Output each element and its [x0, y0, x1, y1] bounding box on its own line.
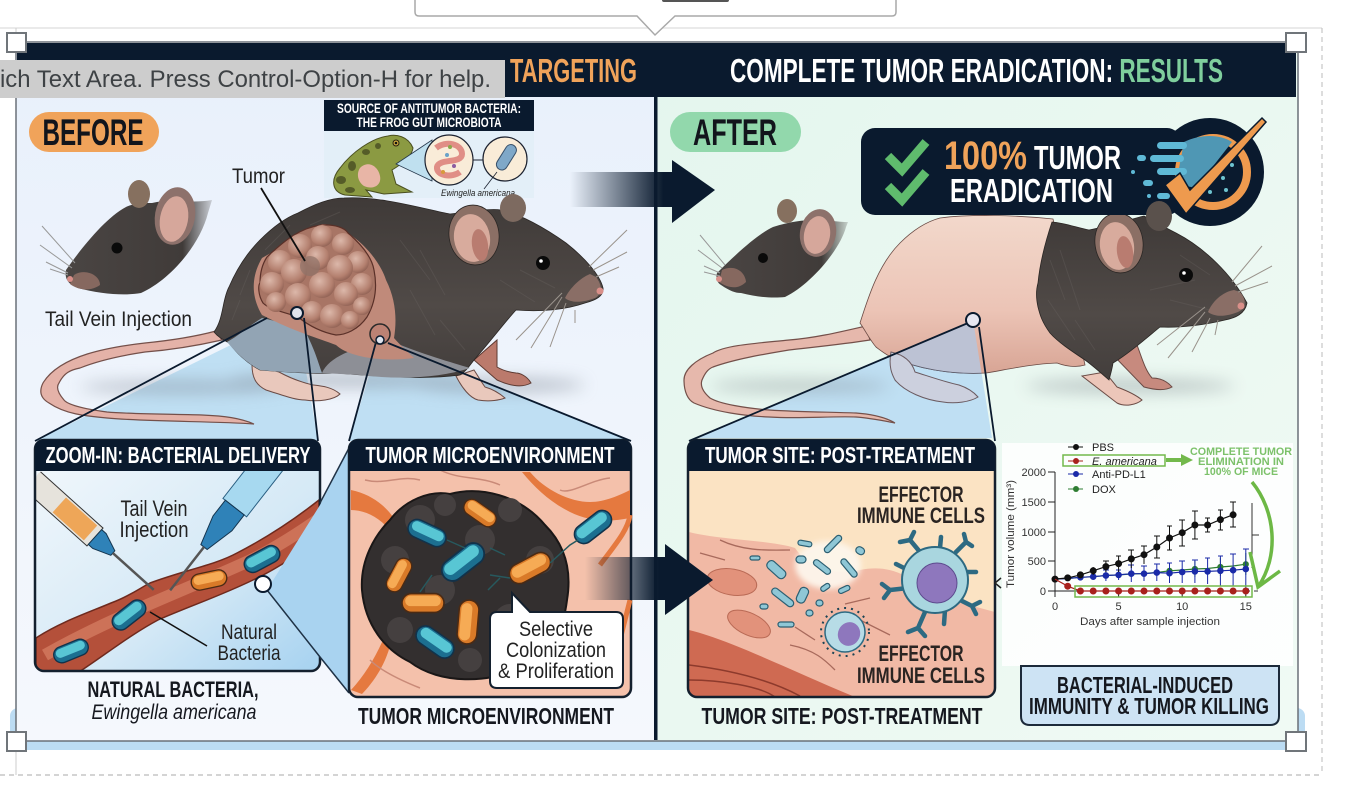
shadow under left mouse — [80, 373, 585, 393]
text: 100% tumor eradication — [944, 134, 1121, 209]
tumor core — [362, 491, 569, 679]
caption: tumor microenvironment: TUMOR MICROENVIRONMENT — [358, 703, 614, 729]
pink body — [860, 215, 1085, 373]
right mouse back ear over badge — [1146, 201, 1172, 231]
tumor mass — [259, 225, 376, 335]
label: effector immune cells top — [857, 482, 985, 528]
caption: natural bacteria — [88, 677, 258, 724]
panel: after background — [656, 44, 1298, 741]
header — [35, 440, 320, 471]
panel: tumor site post-treatment: TUMOR SITE: POST-TREATMENT — [705, 442, 975, 468]
label: tail vein injection: Injection — [120, 517, 188, 542]
editor toolbar popup — [415, 0, 896, 35]
debris fragments — [750, 534, 866, 627]
eye and nose — [1179, 268, 1193, 282]
legend: E. americana — [1092, 456, 1157, 468]
axis labels: Days after sample injection — [1080, 616, 1220, 628]
centre divider — [654, 97, 658, 740]
fur highlights — [1048, 250, 1210, 350]
beam: tumor site zoom fill — [698, 320, 992, 438]
chart: tumor volume — [995, 442, 1293, 666]
series: anti-PD-L1 — [1055, 549, 1249, 589]
axis labels: 2000 — [1022, 467, 1046, 479]
blood vessel — [36, 500, 319, 672]
legend — [1063, 442, 1165, 496]
label: natural bacteria: Bacteria — [218, 642, 281, 665]
title: complete tumor eradication results: COMPLETE TUMOR ERADICATION: RESULTS — [730, 52, 1223, 89]
syringe: left — [36, 472, 154, 591]
icon: large immune cell — [882, 532, 980, 636]
note: complete tumor elimination — [1190, 446, 1292, 478]
title: left targeting: TAIL VEIN BACTERIAL INJECTION: — [30, 55, 406, 91]
header — [688, 440, 995, 471]
panel: frog gut source: THE FROG GUT MICROBIOTA — [356, 115, 502, 130]
body tinted by beam — [898, 324, 982, 374]
axis labels: 0 — [1040, 586, 1046, 598]
tail — [684, 326, 895, 423]
mid leg — [1082, 372, 1142, 405]
caption: tumor site: TUMOR SITE: POST-TREATMENT — [702, 703, 982, 729]
text: 100% tumor eradication: TUMOR — [1034, 139, 1121, 176]
header bar — [17, 43, 1296, 97]
panel: tumor site post-treatment — [688, 440, 995, 697]
label: tail vein injection: Tail Vein — [120, 496, 188, 521]
tooltip: rich text area help — [0, 60, 505, 98]
treated mouse — [684, 210, 1272, 423]
series: PBS — [1052, 502, 1236, 582]
shadow under right mouse — [710, 379, 1235, 393]
ears — [500, 194, 526, 222]
panel: frog gut source: Ewingella americana — [441, 188, 515, 199]
tissue — [689, 532, 995, 697]
axis labels: Tumor volume (mm³) — [1005, 480, 1017, 588]
panel: frog gut source: SOURCE OF ANTITUMOR BACTERIA: — [337, 101, 521, 116]
beam outlines: tail vein — [35, 307, 318, 441]
panel: zoom-in bacterial delivery — [34, 438, 322, 672]
label: effector immune cells bottom: IMMUNE CELLS — [857, 663, 985, 688]
mouse with tumor — [41, 194, 627, 424]
cells in tissue — [708, 568, 758, 596]
small mouse: after — [698, 199, 848, 298]
axis labels: 1500 — [1022, 497, 1046, 509]
header — [349, 440, 631, 471]
arrow: before to after top — [570, 160, 715, 223]
icon: gut close-up — [396, 135, 473, 185]
significance bracket — [1252, 503, 1259, 591]
label: tumor: Tumor — [232, 165, 285, 188]
panel border — [35, 440, 320, 671]
note: complete tumor elimination: 100% OF MICE — [1204, 466, 1278, 478]
series: DOX — [1055, 553, 1248, 579]
caption: natural bacteria: Ewingella americana — [92, 701, 256, 724]
caption: natural bacteria: NATURAL BACTERIA, — [88, 677, 258, 702]
axis labels: 1000 — [1022, 527, 1046, 539]
arrow: legend to note — [1166, 454, 1193, 466]
axes — [1048, 472, 1250, 597]
vessel — [689, 630, 855, 697]
rear leg — [252, 365, 340, 401]
ears — [1091, 210, 1147, 276]
label: effector immune cells top: IMMUNE CELLS — [857, 503, 985, 528]
axis labels: 0 — [1052, 601, 1058, 613]
beam outlines: tumor site — [689, 313, 995, 441]
front leg — [1113, 345, 1172, 390]
beam: vessel to tumor microenvironment — [255, 448, 349, 693]
syringe: right — [169, 471, 283, 591]
mid leg — [456, 370, 505, 401]
axis labels: 500 — [1028, 556, 1046, 568]
tooltip: rich text area help: ich Text Area. Press Control-Option-H for help. — [0, 66, 491, 93]
axis labels — [1005, 467, 1252, 628]
dark head and shoulders — [1036, 216, 1247, 380]
badge: after: AFTER — [693, 112, 777, 153]
rear leg — [890, 352, 978, 403]
icon: bacterium close-up — [473, 137, 527, 189]
icon: frog — [334, 135, 413, 197]
caption box: bacterial-induced immunity: IMMUNITY & TUMOR KILLING — [1029, 693, 1269, 719]
label: natural bacteria — [150, 612, 281, 665]
arrow: curved elimination — [1250, 482, 1280, 587]
body — [214, 198, 603, 377]
muzzle — [1208, 290, 1245, 316]
caption box: bacterial-induced immunity — [1021, 666, 1279, 725]
pointer: tumor — [261, 188, 305, 261]
panel: before background — [16, 44, 656, 741]
bacteria in vessel — [51, 543, 283, 665]
label: tail vein injection — [120, 496, 188, 542]
beam: tumor microenvironment zoom fill — [349, 340, 631, 441]
beam outlines: tumor microenvironment — [349, 324, 631, 441]
highlight box on zero line — [1075, 586, 1252, 597]
panel: tumor microenvironment: TUMOR MICROENVIRONMENT — [366, 442, 614, 468]
orange vessels — [522, 472, 630, 520]
callout: selective colonization: Selective — [519, 618, 593, 641]
light-blue strip behind the graphic — [10, 708, 1305, 750]
badge: before — [29, 112, 159, 153]
skin around tumor — [254, 224, 414, 359]
legend: Anti-PD-L1 — [1092, 469, 1146, 481]
note: complete tumor elimination: COMPLETE TUMOR — [1190, 446, 1292, 458]
note: complete tumor elimination: ELIMINATION IN — [1198, 456, 1284, 468]
axis labels: 10 — [1176, 601, 1188, 613]
label: effector immune cells bottom: EFFECTOR — [878, 641, 964, 666]
legend: PBS — [1092, 442, 1114, 454]
title: left targeting: TUMOR — [418, 55, 502, 91]
caption box: bacterial-induced immunity: BACTERIAL-INDUCED — [1057, 672, 1233, 698]
label: effector immune cells bottom — [857, 641, 985, 688]
title: left targeting: TARGETING — [510, 52, 637, 89]
legend: DOX — [1092, 484, 1116, 496]
eye and nose — [536, 256, 550, 270]
axis labels: 15 — [1240, 601, 1252, 613]
panel: frog gut source — [324, 100, 534, 199]
tail — [41, 331, 254, 424]
panel: tumor microenvironment — [349, 440, 631, 697]
panel: zoom-in bacterial delivery: ZOOM-IN: BACTERIAL DELIVERY — [46, 442, 310, 468]
label: effector immune cells top: EFFECTOR — [878, 482, 964, 507]
badge: 100% tumor eradication — [861, 118, 1266, 226]
blue-gray belly — [227, 318, 322, 373]
icon: eradication seal — [1131, 118, 1266, 226]
callout: selective colonization — [490, 593, 623, 688]
small mouse: before — [40, 180, 212, 294]
text: 100% tumor eradication: ERADICATION — [950, 172, 1113, 209]
text: 100% tumor eradication: 100% — [944, 134, 1027, 178]
arrow: before to after lower — [585, 544, 713, 615]
bacteria on tumor — [383, 496, 615, 662]
muzzle — [565, 274, 601, 302]
callout: selective colonization: & Proliferation — [498, 660, 614, 683]
axis labels: 5 — [1116, 601, 1122, 613]
icon: small immune cell — [821, 608, 869, 656]
beam: tail vein zoom fill — [35, 313, 318, 441]
fur highlights — [232, 212, 555, 350]
label: natural bacteria: Natural — [221, 621, 277, 644]
badge: before: BEFORE — [42, 112, 144, 153]
front leg — [474, 340, 531, 386]
series: E. americana — [1055, 579, 1249, 594]
callout: selective colonization: Colonization — [506, 639, 606, 662]
cleared zone — [795, 541, 861, 589]
icon: green checks — [888, 142, 926, 200]
label: tail vein injection: Tail Vein Injection — [45, 308, 192, 331]
panel border — [688, 440, 995, 697]
